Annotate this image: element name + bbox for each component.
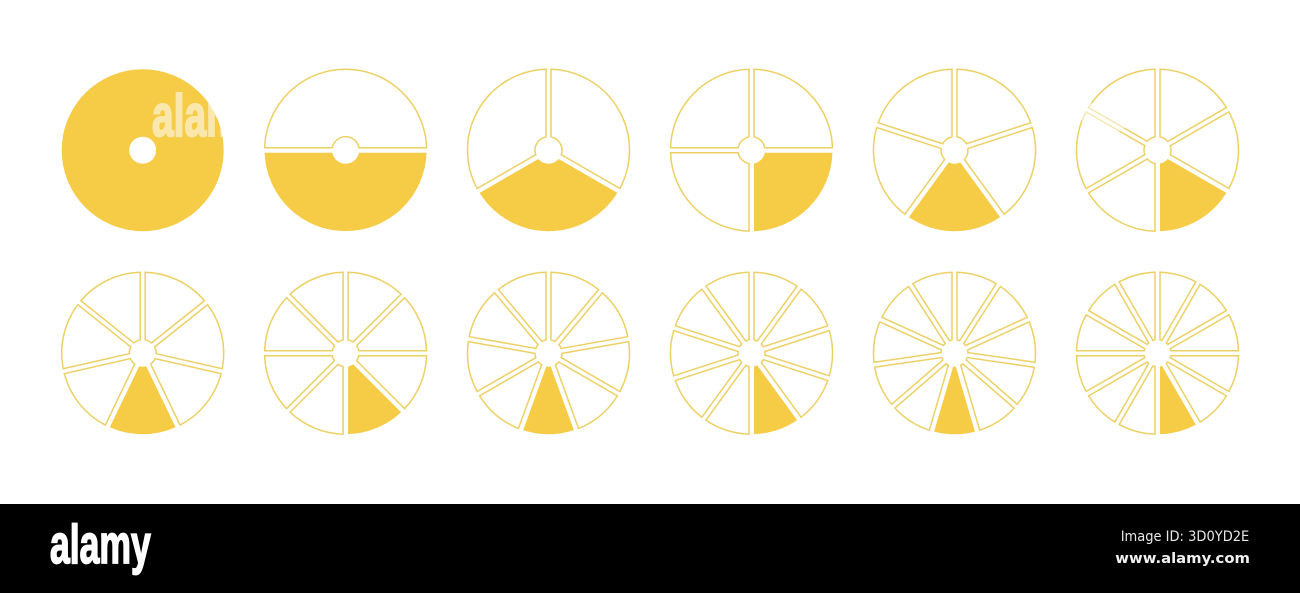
wheel: 12 divisions bbox=[1074, 270, 1241, 436]
filled sector bbox=[720, 119, 848, 247]
image id text: Image ID: 3D0YD2E bbox=[1121, 529, 1249, 545]
wheel: 7 divisions bbox=[56, 266, 229, 434]
wheel: 1 of 1 filled bbox=[62, 69, 224, 231]
filled sector bbox=[1131, 142, 1231, 240]
filled sector bbox=[324, 354, 403, 439]
filled sector bbox=[265, 153, 427, 231]
wheel: 10 divisions bbox=[671, 269, 832, 437]
wheel: 4 divisions bbox=[655, 54, 848, 247]
website text: www.alamy.com bbox=[1115, 551, 1250, 567]
footer logo: alamy: alamy bbox=[50, 513, 151, 575]
watermark: faded patch over wheel 6 bbox=[1082, 103, 1124, 131]
wheel: 2 divisions bbox=[265, 69, 427, 231]
wheel: 8 divisions bbox=[260, 267, 431, 439]
wheel: 5 divisions bbox=[863, 58, 1046, 231]
wheel: 9 divisions bbox=[464, 268, 633, 434]
watermark: faint alamy logo: alamy bbox=[152, 83, 263, 149]
filled sector bbox=[480, 159, 617, 231]
filled sector bbox=[909, 162, 1000, 231]
wheel: 11 divisions bbox=[871, 270, 1038, 434]
wheel: 3 divisions bbox=[444, 50, 653, 231]
filled sector bbox=[110, 366, 176, 434]
filled sector bbox=[523, 367, 574, 434]
filled sector bbox=[734, 359, 798, 437]
filled sector bbox=[1143, 361, 1196, 436]
filled sector bbox=[934, 367, 975, 434]
footer bar bbox=[0, 504, 1300, 593]
wheel: 6 divisions bbox=[1077, 61, 1238, 240]
